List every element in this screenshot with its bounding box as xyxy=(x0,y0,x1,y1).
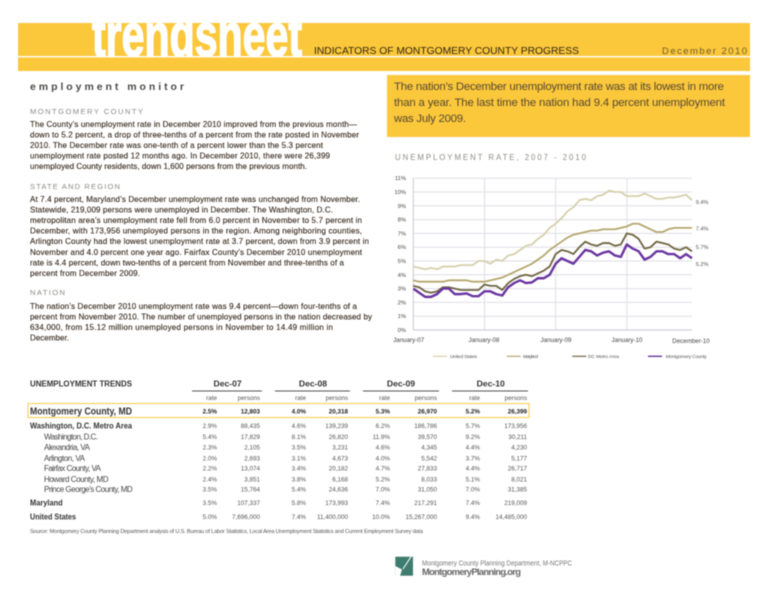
row: Arlington: 3.1% xyxy=(292,455,306,462)
row: Washington, D.C.: 9.2% xyxy=(466,434,480,441)
section: State and Region xyxy=(30,182,369,278)
row: Washington metro area: 173,956 xyxy=(504,423,527,430)
end-of-line value labels: 7.4% xyxy=(696,227,708,233)
row: United States: United States xyxy=(30,512,76,522)
section: Nation: percent from November 2010. The number of unemployed persons in the nation decreased by xyxy=(30,312,372,322)
column headers: rate xyxy=(295,395,306,402)
row: Howard: 5.2% xyxy=(376,476,390,483)
section: Montgomery County: MONTGOMERY COUNTY xyxy=(30,107,143,116)
section: Nation: December. xyxy=(30,334,69,342)
row: Washington, D.C.: 11.9% xyxy=(373,434,390,441)
row: Washington, D.C.: 39,570 xyxy=(418,434,437,441)
row: Maryland: 107,337 xyxy=(237,500,260,507)
row: Howard: 8,033 xyxy=(421,476,437,483)
chart legend xyxy=(433,354,707,360)
subtitle: INDICATORS OF MONTGOMERY COUNTY PROGRESS xyxy=(314,45,579,57)
table title: UNEMPLOYMENT TRENDS xyxy=(30,378,132,388)
row: Washington, D.C.: 26,820 xyxy=(329,434,348,441)
row: Washington metro area: 6.2% xyxy=(376,423,390,430)
end-of-line value labels: 5.2% xyxy=(696,262,708,268)
row: Howard: 5.1% xyxy=(466,476,480,483)
y axis labels: 3% xyxy=(398,287,406,293)
row: Prince George's: 24,636 xyxy=(329,487,348,494)
highlighted row: Montgomery County: 12,803 xyxy=(241,409,260,416)
callout: national rate xyxy=(387,75,750,137)
chart legend: United States xyxy=(450,354,478,360)
date: December 2010 xyxy=(662,46,747,57)
y axis labels: 4% xyxy=(398,273,406,279)
callout: national rate: than a year. The last time the nation had 9.4 percent unemployment xyxy=(394,97,726,109)
year headers: Dec-09 xyxy=(387,378,415,388)
year headers: Dec-10 xyxy=(477,378,505,388)
row: United States: 9.4% xyxy=(466,514,480,521)
row: Arlington: 5,177 xyxy=(511,455,527,462)
section: Nation: The nation’s December 2010 unemployment rate was 9.4 percent—down four-tenths of a xyxy=(30,302,358,311)
section: Nation xyxy=(30,288,372,342)
row: Washington, D.C. xyxy=(44,432,527,442)
row: Maryland: 7.4% xyxy=(376,500,390,507)
row: Arlington: 2,693 xyxy=(244,455,260,462)
callout: national rate: was July 2009. xyxy=(393,113,466,125)
row: Prince George's: 7.0% xyxy=(376,487,390,494)
row: United States: 14,485,000 xyxy=(495,514,527,521)
highlighted row: Montgomery County xyxy=(28,404,529,418)
row: Alexandria: 2.3% xyxy=(203,444,217,451)
row: Maryland: 173,993 xyxy=(325,500,348,507)
end-of-line value labels xyxy=(696,200,708,268)
column headers: rate xyxy=(206,395,217,402)
row: Prince George's: 15,764 xyxy=(241,487,260,494)
row: Fairfax: 3.4% xyxy=(292,466,306,473)
section: State and Region: December, with 173,956 unemployed persons in the region. Among neighboring counties, xyxy=(30,226,362,236)
y axis labels: 6% xyxy=(398,245,406,251)
row: United States xyxy=(30,512,527,522)
column headers: persons xyxy=(326,395,348,402)
row: Prince George's: 31,050 xyxy=(418,487,437,494)
section: State and Region: At 7.4 percent, Maryland’s December unemployment rate was unchanged from November. xyxy=(30,195,360,204)
y axis labels: 9% xyxy=(398,204,406,210)
y axis labels: 1% xyxy=(398,314,406,320)
highlighted row: Montgomery County: 5.3% xyxy=(376,409,390,416)
logo: Montgomery Planning: Montgomery County Planning Department, M-NCPPC xyxy=(422,559,572,568)
highlighted row: Montgomery County: 26,970 xyxy=(418,409,437,416)
row: Howard: 8,021 xyxy=(511,476,527,483)
row: Arlington: 3.7% xyxy=(466,455,480,462)
column headers: rate xyxy=(469,395,480,402)
y axis labels: 2% xyxy=(398,300,406,306)
row: Howard: 2.4% xyxy=(203,476,217,483)
chart heading: UNEMPLOYMENT RATE, 2007 - 2010 xyxy=(395,153,587,162)
row: Alexandria: 4.4% xyxy=(466,444,480,451)
table: unemployment trends xyxy=(28,378,529,522)
chart legend: DC Metro Area xyxy=(588,354,619,360)
section: State and Region: November and 4.0 percent one year ago. Fairfax County’s December 2010 unemployment xyxy=(30,248,363,257)
row: Washington, D.C.: Washington, D.C. xyxy=(44,432,98,442)
highlighted row: Montgomery County: Montgomery County, MD xyxy=(30,407,132,418)
column headers xyxy=(206,395,527,402)
row: Alexandria: 3.5% xyxy=(292,444,306,451)
x axis labels xyxy=(393,337,710,345)
y axis labels: 7% xyxy=(398,231,406,237)
section: Nation: NATION xyxy=(30,288,65,297)
section: Nation: 634,000, from 15.12 million unemployed persons in November to 14.49 million in xyxy=(30,323,333,332)
row: Prince George's: 5.4% xyxy=(292,487,306,494)
row: Prince George's xyxy=(44,485,527,494)
year headers: Dec-07 xyxy=(214,378,242,388)
row: Alexandria: 4,345 xyxy=(421,444,437,451)
row: Washington metro area: 4.6% xyxy=(292,423,306,430)
row: Fairfax: 27,833 xyxy=(418,466,437,473)
callout: national rate: The nation’s December unemployment rate was at its lowest in more xyxy=(394,81,724,93)
section: Montgomery County: down to 5.2 percent, a drop of three-tenths of a percent from the rate posted in November xyxy=(30,131,359,140)
row: Fairfax: 4.4% xyxy=(466,466,480,473)
data lines xyxy=(413,191,692,297)
x axis labels: January-08 xyxy=(469,337,500,344)
row: Washington metro area: 5.7% xyxy=(466,423,480,430)
row: United States: 5.0% xyxy=(203,514,217,521)
line chart: unemployment rate xyxy=(393,176,710,360)
row: Howard xyxy=(44,475,527,484)
row: Arlington: 4.0% xyxy=(376,455,390,462)
row: Washington, D.C.: 8.1% xyxy=(292,434,306,441)
chart legend: Maryland xyxy=(523,354,538,360)
column headers: persons xyxy=(505,395,527,402)
row: Alexandria: 2,105 xyxy=(244,444,260,451)
title: trendsheet: trendsheet xyxy=(92,2,302,69)
year headers: Dec-08 xyxy=(299,378,327,388)
chart legend: Montgomery County xyxy=(666,354,707,360)
row: United States: 7.4% xyxy=(292,514,306,521)
row: Prince George's: Prince George’s County, MD xyxy=(44,485,133,494)
row: Arlington: 2.0% xyxy=(203,455,217,462)
row: Washington metro area: 186,786 xyxy=(414,423,437,430)
row: Washington, D.C.: 17,829 xyxy=(241,434,260,441)
section: Montgomery County: unemployment rate posted 12 months ago. In December 2010, there were 26,399 xyxy=(30,152,331,161)
highlighted row: Montgomery County: 2.5% xyxy=(203,409,217,416)
column headers: rate xyxy=(379,395,390,402)
row: Alexandria: 4.6% xyxy=(376,444,390,451)
highlighted row: Montgomery County: 5.2% xyxy=(466,409,480,416)
row: Arlington: 5,542 xyxy=(421,455,437,462)
section: Montgomery County: unemployed County residents, down 1,600 persons from the previous month. xyxy=(30,162,307,171)
row: Fairfax: 13,074 xyxy=(241,466,260,473)
row: United States: 11,400,000 xyxy=(317,514,348,521)
row: United States: 15,267,000 xyxy=(405,514,437,521)
row: Maryland: Maryland xyxy=(30,498,63,508)
row: Arlington xyxy=(44,454,527,463)
x axis labels: December-10 xyxy=(672,338,710,345)
column headers: persons xyxy=(238,395,260,402)
row: United States: 10.0% xyxy=(372,514,390,521)
logo: Montgomery Planning xyxy=(395,557,572,577)
section: State and Region: Statewide, 219,009 persons were unemployed in December. The Washington, D.C. xyxy=(30,206,333,214)
row: Howard: 3.8% xyxy=(292,476,306,483)
section: State and Region: STATE AND REGION xyxy=(30,182,120,191)
row: Fairfax: 26,717 xyxy=(508,466,527,473)
y axis labels: 10% xyxy=(394,190,406,196)
row: Maryland: 5.8% xyxy=(292,500,306,507)
row: Arlington: 4,673 xyxy=(332,455,348,462)
row: Alexandria: 3,231 xyxy=(332,444,348,451)
section: Montgomery County: The County’s unemployment rate in December 2010 improved from the previous month— xyxy=(30,120,357,129)
end-of-line value labels: 5.7% xyxy=(696,245,708,251)
row: Prince George's: 3.5% xyxy=(203,487,217,494)
row: Fairfax: 2.2% xyxy=(203,466,217,473)
row: Fairfax: 4.7% xyxy=(376,466,390,473)
row: Alexandria xyxy=(44,443,527,452)
row: Howard: 6,168 xyxy=(332,476,348,483)
row: Washington, D.C.: 30,211 xyxy=(508,434,527,441)
section: Montgomery County: 2010. The December rate was one-tenth of a percent lower than the 5.3 percent xyxy=(30,141,324,150)
row: Arlington: Arlington, VA xyxy=(44,454,86,463)
row: Howard: 3,851 xyxy=(244,476,260,483)
row: Washington metro area: 88,435 xyxy=(241,423,260,430)
section: State and Region: rate is 4.4 percent, down two-tenths of a percent from November and three-tenths of a xyxy=(30,258,345,268)
row: Maryland: 217,291 xyxy=(414,500,437,507)
y axis labels: 5% xyxy=(398,259,406,265)
row: Washington metro area xyxy=(30,421,527,431)
row: Alexandria: 4,230 xyxy=(511,444,527,451)
row: Maryland: 3.5% xyxy=(203,500,217,507)
heading: employment monitor: employment monitor xyxy=(30,81,184,93)
row: Prince George's: 7.0% xyxy=(466,487,480,494)
row: Maryland xyxy=(30,498,527,508)
row: Fairfax: 20,182 xyxy=(329,466,348,473)
year headers xyxy=(192,378,528,391)
highlighted row: Montgomery County: 4.0% xyxy=(292,409,306,416)
end-of-line value labels: 9.4% xyxy=(696,200,708,206)
highlighted row: Montgomery County: 20,318 xyxy=(329,409,348,416)
row: United States: 7,696,000 xyxy=(232,514,260,521)
row: Howard: Howard County, MD xyxy=(44,475,109,484)
row: Fairfax xyxy=(44,464,527,473)
icon: planning department mark xyxy=(395,557,413,576)
header banner xyxy=(18,2,750,71)
row: Washington metro area: 2.9% xyxy=(203,423,217,430)
row: Alexandria: Alexandria, VA xyxy=(44,443,91,452)
logo: Montgomery Planning: MontgomeryPlanning.org xyxy=(422,566,521,577)
x axis labels: January-07 xyxy=(393,337,425,344)
row: Prince George's: 31,385 xyxy=(508,487,527,494)
column headers: persons xyxy=(415,395,437,402)
row: Fairfax: Fairfax County, VA xyxy=(44,464,102,473)
section: State and Region: metropolitan area’s unemployment rate fell from 6.0 percent in November to 5.7 percent in xyxy=(30,216,362,225)
section: State and Region: percent from December 2009. xyxy=(30,269,140,278)
highlighted row: Montgomery County: 26,399 xyxy=(508,409,527,416)
section: Montgomery County xyxy=(30,107,359,171)
x axis labels: January-09 xyxy=(541,337,572,344)
y axis labels: 8% xyxy=(398,218,406,224)
section: State and Region: Arlington County had the lowest unemployment rate at 3.7 percent, down from 3.9 percent in xyxy=(30,237,369,246)
y axis labels: 11% xyxy=(395,176,406,182)
row: Maryland: 7.4% xyxy=(466,500,480,507)
y axis labels xyxy=(394,176,406,334)
x axis labels: January-10 xyxy=(612,337,643,344)
row: Washington metro area: 139,239 xyxy=(325,423,348,430)
y axis labels: 0% xyxy=(398,328,406,334)
row: Maryland: 219,009 xyxy=(504,500,527,507)
row: Washington metro area: Washington, D.C. Metro Area xyxy=(30,421,132,431)
row: Washington, D.C.: 5.4% xyxy=(203,434,217,441)
source note: Source: Montgomery County Planning Department analysis of U.S. Bureau of Labor Statistics, Local Area Unemployment Statistics and Current Employment Survey data xyxy=(30,529,424,535)
